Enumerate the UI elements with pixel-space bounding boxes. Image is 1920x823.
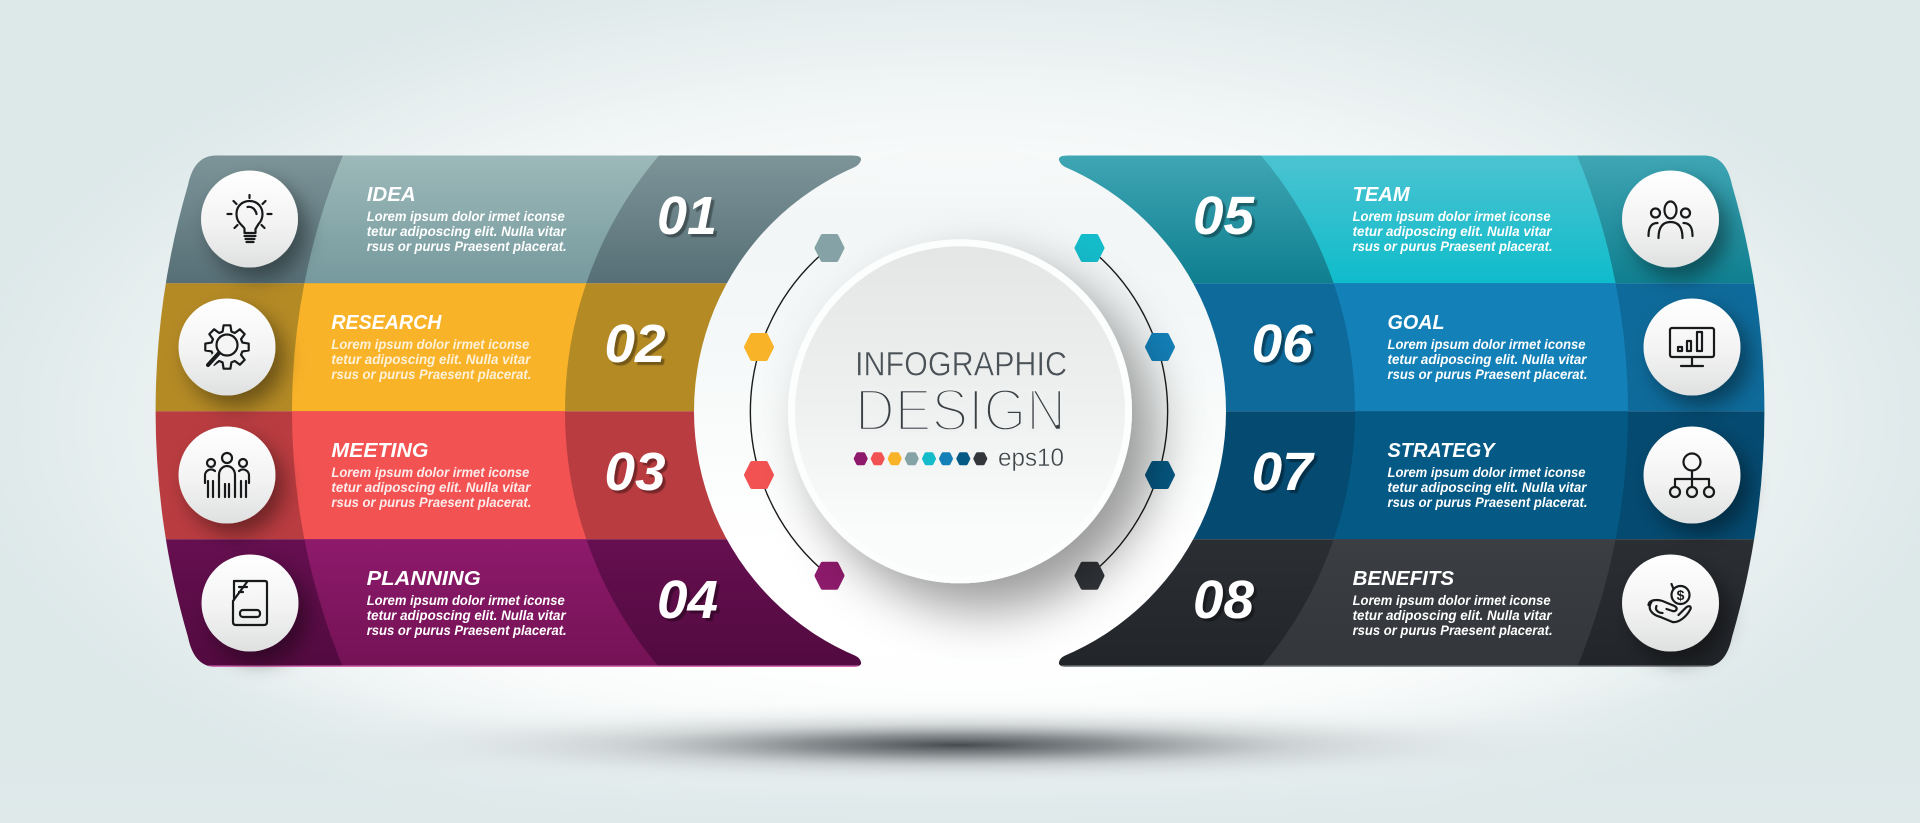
step 08 text	[1193, 567, 1553, 638]
body: Lorem ipsum dolor irmet iconse	[331, 336, 530, 352]
body: tetur adiposcing elit. Nulla vitar	[1353, 607, 1553, 623]
body: Lorem ipsum dolor irmet iconse	[331, 464, 530, 480]
node 07	[1147, 463, 1173, 487]
body: Lorem ipsum dolor irmet iconse	[367, 592, 565, 608]
body: tetur adiposcing elit. Nulla vitar	[1353, 223, 1553, 239]
node 04	[816, 564, 842, 588]
body: rsus or purus Praesent placerat.	[1353, 238, 1553, 254]
dot 6	[940, 454, 952, 464]
hexagon nodes	[746, 236, 1173, 588]
connector arc: right	[1089, 248, 1168, 576]
number: 07	[1252, 442, 1316, 502]
band: goal	[1193, 283, 1764, 412]
body: Lorem ipsum dolor irmet iconse	[1388, 464, 1586, 480]
body: Lorem ipsum dolor irmet iconse	[1353, 592, 1551, 608]
floor shadow	[258, 701, 1658, 789]
body: Lorem ipsum dolor irmet iconse	[1353, 208, 1551, 224]
dot 5	[924, 454, 934, 464]
body: rsus or purus Praesent placerat.	[331, 494, 531, 510]
icon: monitor chart	[1670, 328, 1714, 366]
icon disc: meeting	[178, 426, 276, 524]
step 02 text	[331, 311, 666, 382]
center disc	[788, 239, 1132, 583]
heading: TEAM	[1353, 183, 1411, 206]
node 05	[1076, 236, 1102, 260]
heading: IDEA	[367, 183, 416, 206]
band: strategy	[1193, 411, 1764, 540]
body: Lorem ipsum dolor irmet iconse	[1388, 336, 1586, 352]
body: tetur adiposcing elit. Nulla vitar	[367, 223, 567, 239]
step 03 text	[331, 439, 666, 510]
heading: STRATEGY	[1388, 439, 1497, 462]
band: research	[156, 283, 727, 412]
background fade along the bottom	[0, 745, 1920, 823]
band: benefits	[1040, 539, 1780, 668]
number: 08	[1193, 570, 1254, 630]
body: rsus or purus Praesent placerat.	[331, 366, 531, 382]
label: eps10: eps10	[998, 444, 1064, 472]
heading: GOAL	[1388, 311, 1444, 334]
icon: team group	[1648, 202, 1692, 238]
node 03	[746, 463, 772, 487]
node 06	[1147, 335, 1173, 359]
body: rsus or purus Praesent placerat.	[1388, 494, 1588, 510]
icon: gear with magnifier	[205, 325, 249, 369]
node 02	[746, 335, 772, 359]
icon disc: strategy	[1644, 426, 1740, 524]
step 04 text	[367, 567, 718, 638]
title: design: DESIGN	[855, 378, 1066, 444]
band: planning	[140, 539, 880, 668]
body: tetur adiposcing elit. Nulla vitar	[1388, 351, 1588, 367]
number: 06	[1252, 314, 1314, 374]
dot 8	[975, 454, 986, 464]
body: rsus or purus Praesent placerat.	[367, 622, 567, 638]
body	[1388, 464, 1588, 510]
body: rsus or purus Praesent placerat.	[1388, 366, 1588, 382]
body	[1353, 592, 1553, 638]
number: 04	[657, 570, 718, 630]
body	[1388, 336, 1588, 382]
icon disc: idea	[201, 170, 298, 268]
body: tetur adiposcing elit. Nulla vitar	[331, 351, 532, 367]
heading: MEETING	[331, 439, 428, 462]
icon: hand with coin	[1648, 584, 1691, 622]
body: tetur adiposcing elit. Nulla vitar	[1388, 479, 1588, 495]
dot 2	[872, 454, 883, 464]
dot 3	[889, 454, 900, 464]
icon: light bulb	[228, 195, 272, 242]
number: 02	[604, 314, 666, 374]
body: Lorem ipsum dolor irmet iconse	[367, 208, 565, 224]
connector arc: left	[750, 248, 829, 576]
dot 1	[855, 454, 866, 464]
node 01	[816, 236, 842, 260]
band: idea	[140, 155, 880, 283]
large white circle	[694, 145, 1226, 677]
white glow below the panels	[200, 580, 1720, 750]
icon: document card	[233, 581, 267, 625]
number: 03	[604, 442, 666, 502]
icon disc: team	[1622, 170, 1719, 268]
body: tetur adiposcing elit. Nulla vitar	[331, 479, 532, 495]
node 08	[1076, 564, 1102, 588]
heading: PLANNING	[367, 567, 481, 590]
icon disc: goal	[1644, 298, 1740, 396]
icon disc: planning	[202, 554, 298, 652]
title: infographic: INFOGRAPHIC	[855, 345, 1067, 383]
icon disc: benefits	[1622, 554, 1719, 652]
step 06 text	[1252, 311, 1588, 382]
step 07 text	[1252, 439, 1588, 510]
icon: three people	[205, 453, 249, 497]
panel: right bands	[1040, 155, 1780, 668]
heading: RESEARCH	[331, 311, 443, 334]
colour dots	[855, 454, 986, 464]
band: meeting	[156, 411, 727, 540]
body	[331, 464, 532, 510]
body	[1353, 208, 1553, 254]
number: 01	[657, 186, 717, 246]
step 05 text	[1193, 183, 1553, 254]
number: 05	[1193, 186, 1255, 246]
body: tetur adiposcing elit. Nulla vitar	[367, 607, 567, 623]
heading: BENEFITS	[1353, 567, 1454, 590]
band: team	[1040, 155, 1780, 283]
icon disc: research	[178, 298, 276, 396]
body: rsus or purus Praesent placerat.	[367, 238, 567, 254]
dot 7	[958, 454, 969, 464]
dot 4	[906, 454, 917, 464]
body	[367, 208, 567, 254]
body	[331, 336, 532, 382]
body: rsus or purus Praesent placerat.	[1353, 622, 1553, 638]
step 01 text	[367, 183, 717, 254]
body	[367, 592, 567, 638]
panel: left bands	[140, 155, 880, 668]
icon: org chart	[1670, 454, 1714, 497]
icon: hand with coin: $	[1677, 587, 1685, 603]
